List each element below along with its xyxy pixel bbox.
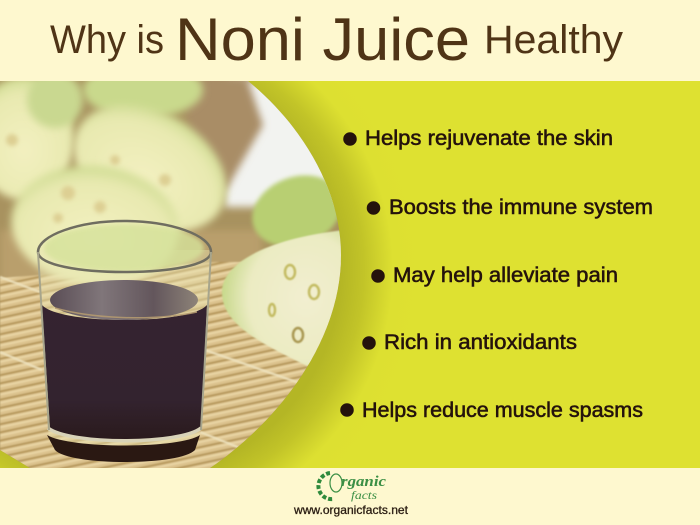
item: skin: Helps rejuvenate the skin: [365, 127, 613, 150]
photo: noni fruit and glass of juice: [0, 62, 352, 471]
item: antioxidants: Rich in antioxidants: [384, 331, 577, 354]
item: muscle: Helps reduce muscle spasms: [362, 399, 643, 422]
panel: green background: [0, 81, 700, 468]
logo wordmark: rganic: [341, 474, 386, 490]
fruit: top small: [27, 72, 83, 128]
glass rim: [38, 221, 211, 272]
far mat: [0, 230, 262, 278]
fruit: behind glass: [6, 164, 179, 286]
title: Noni Juice: [175, 6, 470, 73]
title: [50, 6, 623, 73]
title: Why is: [50, 18, 164, 62]
liquid foam line: [55, 308, 197, 318]
fruit spots: [269, 265, 319, 342]
photo backdrop: [0, 81, 345, 471]
white background area: [225, 81, 345, 207]
glass base: [47, 435, 200, 462]
fruit: right large: [222, 230, 345, 366]
logo leaf ring: [318, 473, 342, 499]
website url: www.organicfacts.net: [293, 503, 409, 517]
liquid body: [42, 305, 207, 440]
glass body: [40, 250, 210, 446]
fruit: right green: [250, 172, 338, 246]
bullet list: [340, 127, 653, 422]
item: pain: May help alleviate pain: [393, 264, 618, 287]
liquid surface: [50, 280, 198, 320]
glass: [37, 221, 212, 462]
mat cords: [0, 277, 305, 448]
bamboo mat: [0, 262, 345, 470]
glass sides: [38, 252, 211, 430]
glass inner fruit view: [44, 224, 204, 272]
fruit blur spots: [6, 134, 171, 223]
logo: Organic Facts: [318, 473, 386, 502]
title: Healthy: [484, 18, 623, 62]
fruit: top left: [0, 76, 74, 200]
fruit: middle: [72, 105, 230, 234]
fruit: top centre: [80, 81, 207, 117]
item: immune: Boosts the immune system: [389, 196, 653, 219]
burlap sack: [218, 81, 268, 192]
glass base highlight: [48, 428, 201, 441]
logo subword: facts: [351, 488, 377, 502]
